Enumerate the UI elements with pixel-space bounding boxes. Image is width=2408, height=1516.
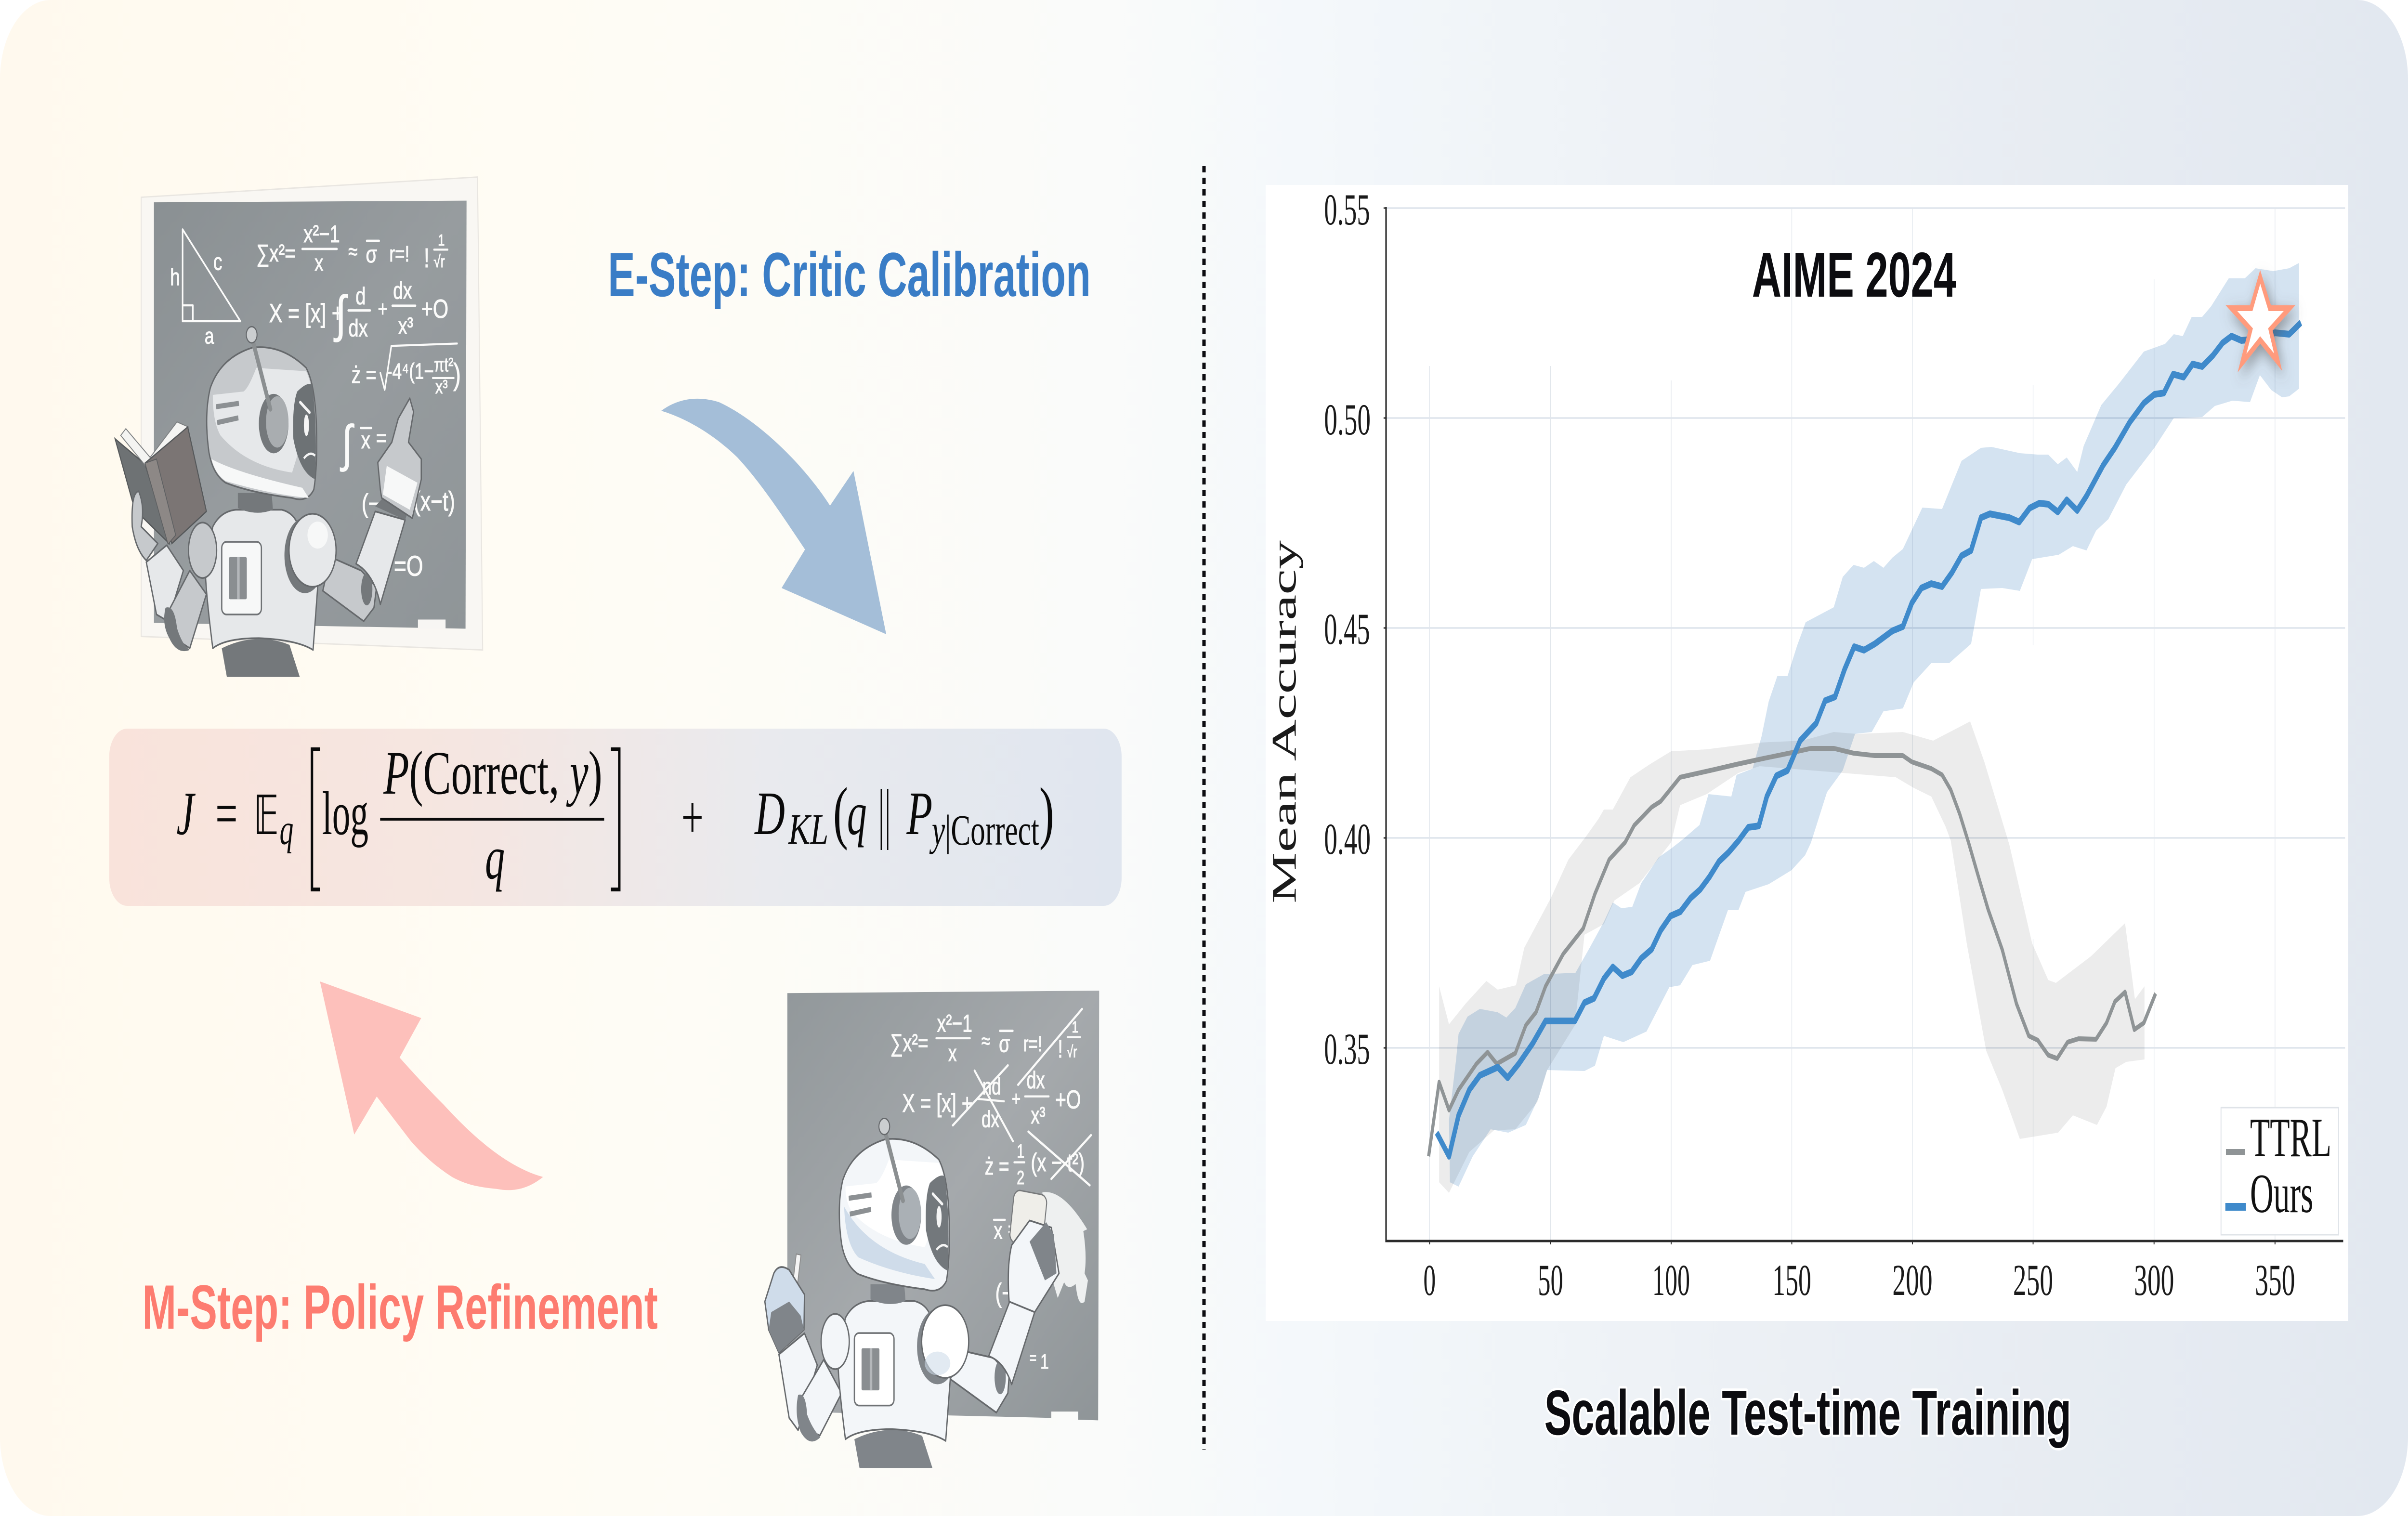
formula: expected log term: 𝔼	[254, 785, 279, 847]
chalk equations with crossings	[890, 1009, 1091, 1373]
chalk equations: +	[378, 297, 388, 321]
x-axis tick labels: 150	[1772, 1255, 1811, 1305]
chalk equations: !	[424, 243, 430, 273]
chalk equations with crossings: (−	[995, 1279, 1013, 1308]
formula bar	[109, 729, 1122, 906]
formula: expected log term	[176, 739, 619, 892]
axes	[1384, 207, 2343, 1244]
chalk equations with crossings: ∑x²=	[890, 1029, 929, 1057]
formula: KL divergence term: (	[833, 773, 848, 851]
y-axis tick labels: 0.35	[1324, 1024, 1370, 1073]
chalk equations with crossings: ż =	[985, 1152, 1009, 1180]
y-axis tick labels: 0.40	[1324, 814, 1371, 863]
star marker	[2232, 277, 2290, 363]
x-axis tick labels: 200	[1892, 1255, 1933, 1305]
right shoulder	[285, 514, 336, 593]
left shoulder	[821, 1314, 849, 1369]
chalk equations with crossings: r=!	[1023, 1032, 1042, 1056]
formula: KL divergence term: y|Correct	[929, 807, 1039, 854]
formula: plus sign: +	[681, 784, 704, 852]
formula: KL divergence term: )	[1039, 773, 1054, 851]
legend: TTRL	[2250, 1107, 2331, 1168]
line: Ours	[1437, 323, 2301, 1156]
x-axis tick labels: 300	[2134, 1255, 2174, 1305]
E-Step heading: E-Step: Critic Calibration	[608, 240, 1091, 310]
robot waist	[222, 639, 300, 677]
formula: KL divergence term: P	[906, 780, 932, 848]
chalk equations with crossings: +O	[1055, 1085, 1081, 1114]
chalk equations: +O	[421, 295, 448, 324]
robot waist	[854, 1430, 932, 1468]
chalk equations with crossings: σ	[999, 1030, 1010, 1058]
band: TTRL variance	[1439, 721, 2145, 1193]
formula: expected log term: q	[279, 806, 293, 854]
chalk equations: √r	[433, 252, 445, 271]
back panel	[222, 542, 262, 614]
line: TTRL	[1428, 748, 2156, 1156]
legend	[2221, 1107, 2339, 1235]
chalk equations: ∫	[334, 286, 348, 342]
chalk equations: dx	[393, 278, 412, 304]
x-axis tick labels: 50	[1538, 1255, 1563, 1305]
chalk equations: -4⁴(1−	[387, 359, 434, 383]
chalkboard frame	[141, 177, 483, 650]
chalk equations with crossings: 1	[1017, 1141, 1024, 1162]
chalk equations: r=!	[389, 241, 409, 266]
chalk equations: ∫	[340, 415, 355, 471]
chalk equations with crossings: +	[1012, 1087, 1021, 1111]
gridlines	[1386, 208, 2345, 1240]
robot right arm erasing	[950, 1189, 1059, 1412]
formula: KL divergence term: KL	[788, 806, 828, 853]
chalk equations with crossings: ≈	[982, 1029, 990, 1053]
chalk equations: x	[361, 427, 370, 454]
chalk equations with crossings: 1	[1072, 1018, 1078, 1036]
caption: Scalable Test-time Training: Scalable Test-time Training	[1544, 1378, 2071, 1449]
chalk equations: =O	[394, 550, 423, 582]
chalk equations	[170, 221, 461, 582]
chalk equations: x²−1	[303, 221, 340, 248]
right shoulder	[917, 1305, 968, 1385]
formula: KL divergence term: q	[847, 780, 867, 848]
chalk tray eraser	[418, 620, 445, 628]
M-Step heading: M-Step: Policy Refinement	[142, 1272, 658, 1343]
formula: expected log term: =	[215, 780, 237, 848]
y-axis tick labels	[1324, 185, 1371, 1073]
formula: KL divergence term: D	[754, 780, 785, 848]
formula: expected log term: q	[485, 824, 505, 892]
chalk equations: ∑x²=	[256, 240, 296, 267]
chalk equations: ż =	[352, 361, 377, 389]
chalk equations with crossings: x²−1	[937, 1010, 972, 1037]
chalk equations: σ	[366, 241, 377, 268]
chalk equations with crossings: x	[948, 1040, 956, 1066]
chalk equations with crossings: x³	[1031, 1103, 1046, 1129]
chalkboard surface	[787, 991, 1099, 1420]
chalk equations: X = [x] +	[269, 299, 343, 328]
y-axis tick labels: 0.50	[1324, 395, 1371, 444]
y-axis tick labels: 0.45	[1324, 604, 1370, 653]
chalk equations with crossings: =	[1030, 1349, 1036, 1367]
chalk equations: d	[355, 283, 366, 310]
chalkboard surface	[154, 201, 467, 628]
robot torso	[205, 510, 318, 650]
y-axis title: Mean Accuracy	[1265, 540, 1303, 903]
chalk equations with crossings: !	[1058, 1034, 1063, 1063]
chalk equations with crossings: 1	[1040, 1350, 1049, 1373]
formula: expected log term: J	[176, 780, 196, 848]
chalk equations: dx	[348, 315, 368, 342]
vertical dotted divider	[1201, 166, 1207, 1450]
robot neck	[238, 493, 273, 513]
chalk equations with crossings: x	[994, 1218, 1003, 1244]
formula: KL divergence term	[754, 773, 1054, 854]
y-axis tick labels: 0.55	[1324, 185, 1370, 234]
arrow: E-step curved blue	[661, 399, 886, 634]
legend: Ours	[2250, 1163, 2313, 1224]
robot illustration: reading at chalkboard	[115, 177, 483, 677]
robot torso	[838, 1301, 950, 1441]
chalk equations with crossings: √r	[1067, 1043, 1077, 1061]
erased chalk smear	[1042, 1192, 1088, 1303]
robot illustration: erasing chalkboard	[765, 991, 1099, 1468]
x-axis tick labels: 0	[1424, 1255, 1436, 1305]
chalk equations: x³	[435, 376, 448, 398]
x-axis tick labels: 250	[2013, 1255, 2053, 1305]
formula: expected log term: P(Correct, y)	[383, 739, 602, 808]
chalk equations: 1	[438, 232, 445, 249]
chart panel: AIME 2024	[1265, 185, 2348, 1321]
chalk equations: x³	[398, 314, 413, 340]
chalk equations: x	[314, 250, 323, 275]
robot head	[839, 1118, 949, 1291]
chalk equations: )	[453, 357, 461, 391]
band: Ours variance	[1449, 263, 2299, 1187]
back panel	[854, 1333, 894, 1406]
chalk equations: ≈	[348, 239, 358, 264]
chalk equations: (x−t)	[414, 486, 455, 516]
chart title: AIME 2024	[1752, 240, 1956, 311]
robot head	[207, 327, 317, 499]
book	[115, 422, 207, 544]
chalk equations with crossings: =	[1008, 1217, 1017, 1242]
chalk equations: c	[213, 249, 222, 275]
chalk equations with crossings: nd	[982, 1073, 1001, 1099]
chalk equations with crossings: dx	[1026, 1067, 1045, 1094]
x-axis tick labels: 350	[2255, 1255, 2295, 1305]
chalk equations with crossings: X = [x] +	[902, 1089, 973, 1118]
chalk equations: πt²	[434, 353, 453, 376]
arrow: M-step curved red	[320, 981, 543, 1190]
chalk equations with crossings: dx	[982, 1106, 999, 1132]
chalk equations: =	[376, 425, 387, 452]
formula: expected log term: log	[322, 780, 368, 848]
robot right arm pointing	[323, 398, 421, 621]
chalk equations: h	[170, 264, 180, 290]
chalk equations with crossings: 2	[1017, 1168, 1024, 1189]
robot body group	[821, 1118, 950, 1468]
robot left arm holding chalk	[765, 1254, 841, 1441]
x-axis tick labels	[1424, 1255, 2295, 1305]
chalk equations: a	[205, 324, 214, 349]
chalk equations: (−	[362, 489, 380, 519]
chalk equations with crossings: (x − t²)	[1031, 1148, 1085, 1176]
robot left arm	[132, 491, 207, 651]
left shoulder	[188, 523, 217, 578]
robot neck	[870, 1284, 905, 1304]
x-axis tick labels: 100	[1652, 1255, 1690, 1305]
